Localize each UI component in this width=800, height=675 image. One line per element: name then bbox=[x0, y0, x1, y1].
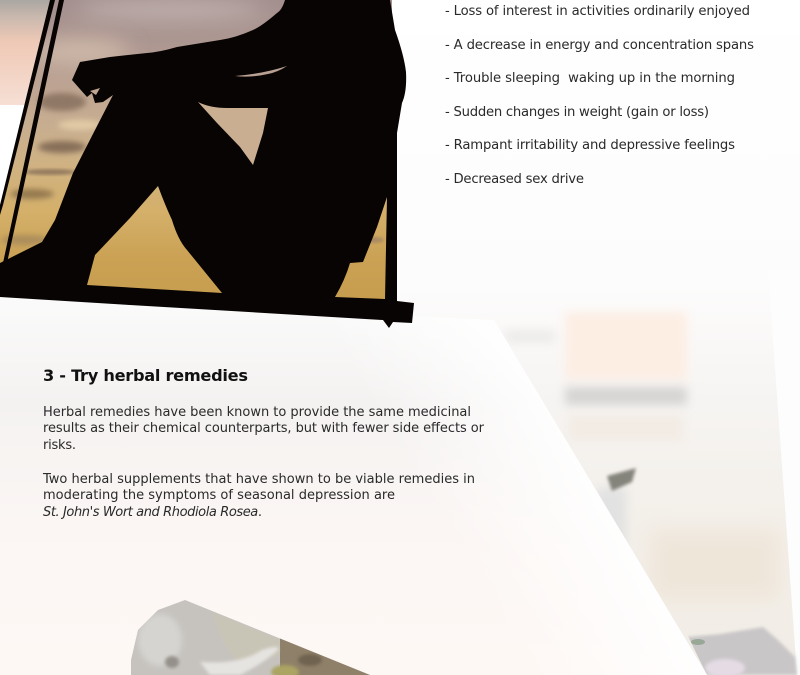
panel highlight toward right edge bbox=[0, 296, 707, 675]
symptoms list: - Sudden changes in weight (gain or loss) bbox=[445, 105, 709, 120]
herbal remedies body text bbox=[42, 405, 485, 520]
symptoms list bbox=[445, 4, 754, 187]
herbal remedies body text: risks. bbox=[43, 438, 76, 453]
bottom flower photo fragment bbox=[125, 598, 375, 675]
right translucent strip bbox=[768, 270, 800, 675]
herbal remedies body text: moderating the symptoms of seasonal depression are bbox=[43, 488, 395, 503]
swing ropes bbox=[0, 0, 64, 263]
white lower panel bbox=[0, 296, 707, 675]
symptoms list: - Trouble sleeping waking up in the morning bbox=[445, 71, 735, 86]
herbal remedies body text: Two herbal supplements that have shown to be viable remedies in bbox=[42, 472, 475, 487]
symptoms list: - A decrease in energy and concentration spans bbox=[445, 38, 754, 53]
herbal remedies body text: results as their chemical counterparts, but with fewer side effects or bbox=[43, 421, 485, 436]
symptoms list: - Rampant irritability and depressive feelings bbox=[445, 138, 735, 153]
sunset sky photo bbox=[0, 0, 400, 302]
bottom-right flower fragment bbox=[687, 627, 797, 675]
heading: try herbal remedies: 3 - Try herbal remedies bbox=[43, 366, 248, 385]
top-left blurred photo fragment bbox=[0, 0, 56, 105]
herbal remedies body text: St. John's Wort and Rhodiola Rosea. bbox=[43, 505, 262, 520]
symptoms list: - Loss of interest in activities ordinarily enjoyed bbox=[445, 4, 750, 19]
herbal remedies body text: Herbal remedies have been known to provide the same medicinal bbox=[43, 405, 471, 420]
symptoms list: - Decreased sex drive bbox=[445, 172, 584, 187]
blurred candle background bbox=[400, 0, 800, 675]
silhouette of person sitting on swing bbox=[0, 0, 414, 328]
